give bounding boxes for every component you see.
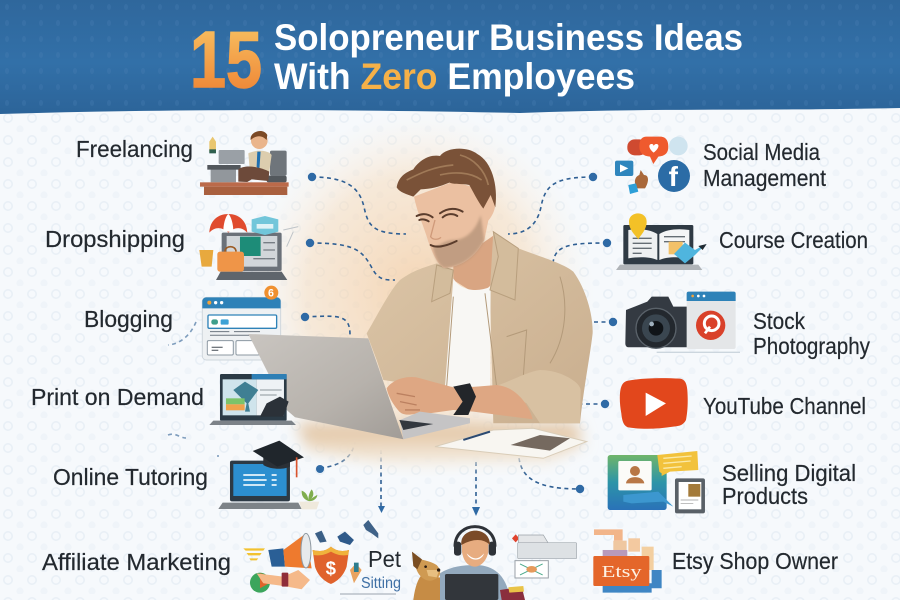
shirt — [367, 232, 593, 423]
icon: megaphone, handshake and shield: $ — [326, 558, 337, 579]
item: Pet Sitting: Sitting — [361, 575, 401, 592]
item: Stock Photography — [625, 292, 870, 359]
item: Stock Photography: Photography — [753, 333, 870, 359]
central illustration: man at laptop — [248, 149, 593, 463]
icon: dog — [412, 552, 462, 600]
header banner — [0, 0, 900, 114]
pen — [463, 432, 490, 440]
item: Dropshipping: Dropshipping — [45, 226, 185, 252]
item: Selling Digital Products — [608, 451, 856, 513]
icon: social media bubbles: f — [669, 161, 679, 192]
item: Course Creation — [616, 213, 868, 270]
icon: Etsy folder stack — [593, 529, 662, 593]
desk — [297, 423, 583, 463]
eyes and mouth — [417, 209, 463, 247]
item: Social Media Management: Management — [703, 165, 827, 191]
sleeve — [493, 370, 581, 423]
arm and hand — [387, 377, 533, 419]
item: Affiliate Marketing: Affiliate Marketing — [42, 549, 231, 575]
icon: print on demand laptop — [209, 374, 296, 425]
icon: digital products cards — [608, 451, 705, 513]
hair — [397, 149, 496, 209]
item: YouTube Channel — [620, 378, 866, 429]
item: Online Tutoring — [53, 441, 319, 509]
title: 15 — [190, 15, 262, 104]
item: Freelancing: Freelancing — [76, 136, 193, 162]
item: Affiliate Marketing — [42, 520, 378, 593]
item: Social Media Management: Social Media — [703, 139, 820, 165]
item: Pet Sitting: Pet — [368, 546, 402, 572]
nose — [431, 220, 441, 239]
icon: video play button — [620, 378, 688, 429]
collar — [432, 232, 518, 302]
item: Blogging: Blogging — [84, 306, 173, 332]
item: Online Tutoring: Online Tutoring — [53, 464, 208, 490]
item: Course Creation: Course Creation — [719, 227, 868, 253]
item: Freelancing — [76, 131, 289, 195]
icon: megaphone, handshake and shield — [243, 520, 378, 593]
title — [190, 15, 743, 104]
icon: Etsy folder stack: Etsy — [602, 562, 642, 581]
t-shirt — [445, 278, 491, 387]
icon: laptop with graduation cap — [218, 441, 319, 509]
icon: social media bubbles — [615, 137, 690, 194]
item: Print on Demand: Print on Demand — [31, 384, 204, 410]
item: Etsy Shop Owner: Etsy Shop Owner — [672, 548, 838, 574]
icon: freelancer at desk — [200, 131, 289, 195]
item: Social Media Management — [615, 137, 827, 194]
laptop — [400, 412, 470, 439]
item: Pet Sitting — [340, 546, 462, 600]
icon: blogging browser window — [202, 286, 281, 360]
icon: person with headset and tablet — [440, 527, 525, 600]
item: Selling Digital Products: Products — [722, 483, 808, 509]
icon: blogging browser window: 6 — [268, 288, 274, 300]
neck — [453, 233, 498, 297]
icon: book on laptop — [616, 213, 707, 270]
item: Selling Digital Products: Selling Digital — [722, 460, 856, 486]
icon: shop laptop with bag and umbrella — [199, 214, 298, 280]
icon: camera and browser window — [625, 292, 740, 352]
connector lines — [168, 173, 617, 516]
phone — [511, 435, 570, 451]
title: With Zero Employees — [274, 56, 635, 97]
item: Dropshipping — [45, 214, 298, 280]
icon: server and card — [512, 534, 577, 578]
watch — [453, 383, 476, 415]
notebook — [435, 428, 587, 458]
beard — [433, 215, 484, 268]
face — [414, 182, 495, 268]
item: Stock Photography: Stock — [753, 308, 805, 334]
title: Solopreneur Business Ideas — [274, 17, 743, 58]
item: Print on Demand — [31, 374, 296, 425]
item: YouTube Channel: YouTube Channel — [703, 393, 866, 419]
item: Etsy Shop Owner — [593, 529, 838, 593]
